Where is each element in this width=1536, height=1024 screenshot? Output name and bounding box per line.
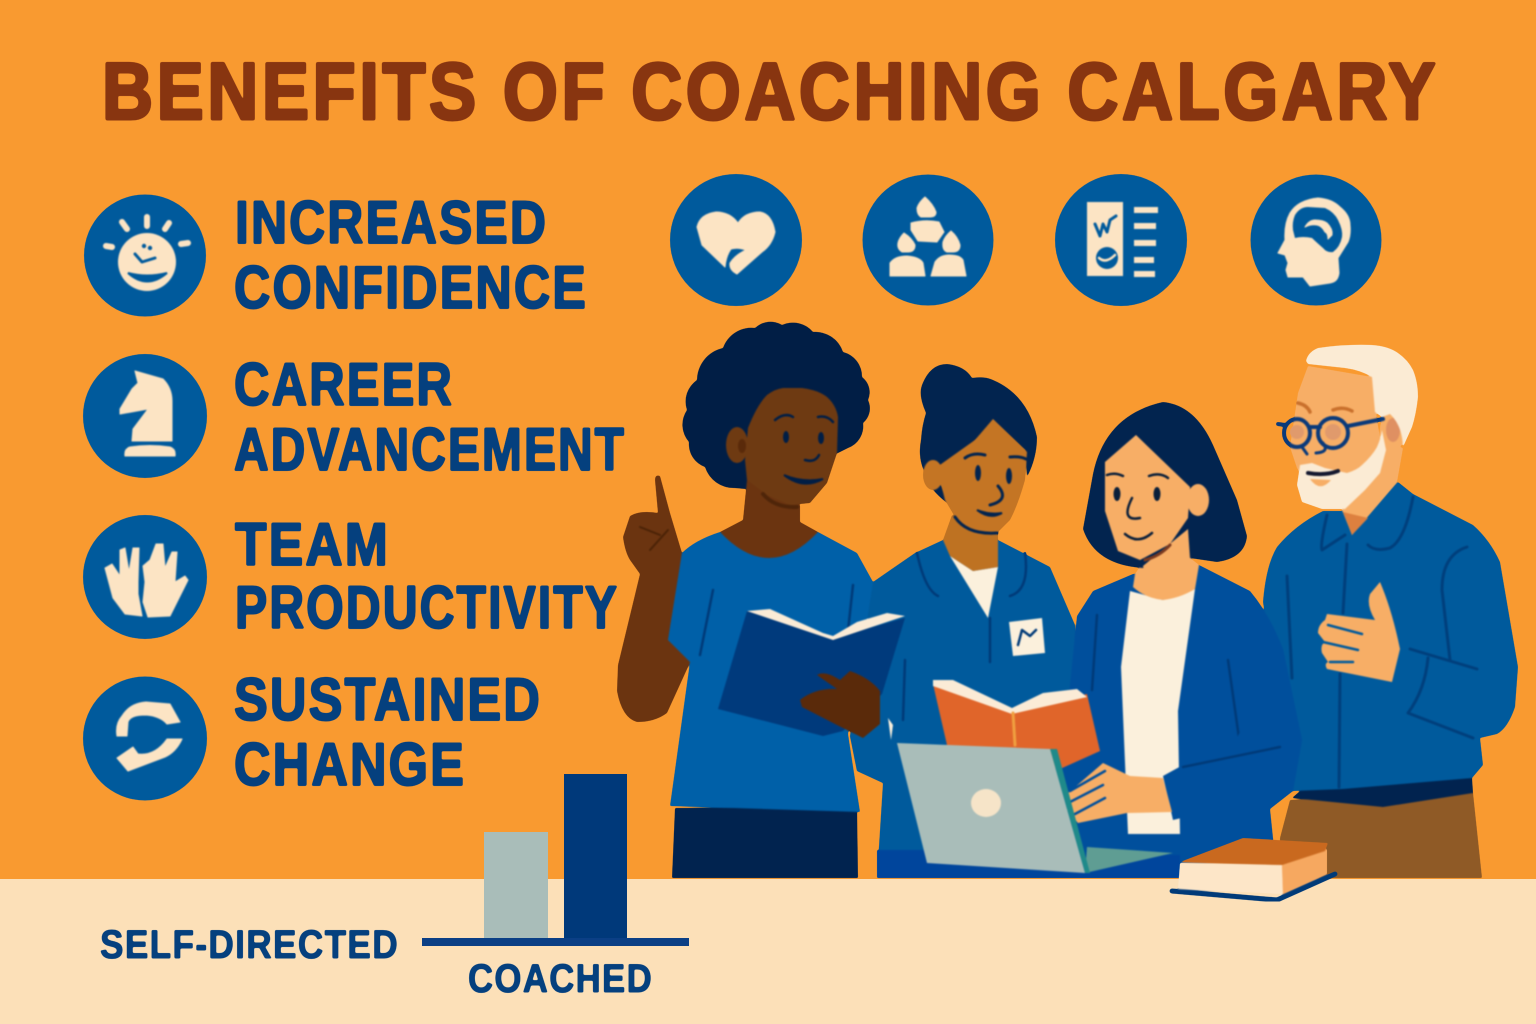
label: career advancement: ADVANCEMENT [234,416,626,483]
label: sustained change [234,666,542,798]
label: increased confidence [234,189,588,321]
benefit: team productivity [83,511,619,641]
laptop [897,743,1173,873]
icon: chess knight [83,354,207,478]
bar: self-directed [484,832,548,938]
benefit: sustained change [83,666,542,800]
label: self-directed: SELF-DIRECTED [100,923,399,967]
book: navy open book [718,609,905,736]
label: sustained change: CHANGE [234,731,466,798]
icon: team pyramid [862,174,994,306]
label: increased confidence: INCREASED [235,189,548,256]
arm raised [617,476,693,722]
label: sustained change: SUSTAINED [234,666,542,733]
person: older man with glasses [1263,345,1518,878]
label: coached: COACHED [468,957,653,1001]
name badge [1009,618,1045,656]
person: woman pointing finger [617,322,873,878]
icon: heart [670,174,802,306]
table surface [0,879,1536,1024]
label: team productivity: TEAM [235,511,390,578]
label: team productivity [235,511,619,641]
hand holding book [800,671,893,783]
hand: man gesturing [1318,582,1400,682]
book stack on table [1172,838,1335,900]
book: orange open book [933,680,1100,769]
benefit: career advancement [83,351,626,483]
icon: head profile [1250,174,1382,306]
bar chart: self-directed vs coached [100,774,689,1001]
icon: document with list [1055,174,1187,306]
forearm and hand on laptop [1067,649,1302,823]
icon: two hands [83,515,207,639]
label: career advancement [234,351,626,483]
label: career advancement: CAREER [234,351,454,418]
icon: cycle arrows [83,676,207,800]
benefit: increased confidence [84,189,588,321]
bar: coached [564,774,627,938]
axis [422,938,689,946]
icon: smiling sun face [84,194,206,316]
label: team productivity: PRODUCTIVITY [235,574,619,641]
illustration: coaching group [617,322,1518,878]
person: woman with hair bun [850,364,1075,878]
label: increased confidence: CONFIDENCE [234,254,588,321]
person: woman in cardigan [1050,402,1302,878]
